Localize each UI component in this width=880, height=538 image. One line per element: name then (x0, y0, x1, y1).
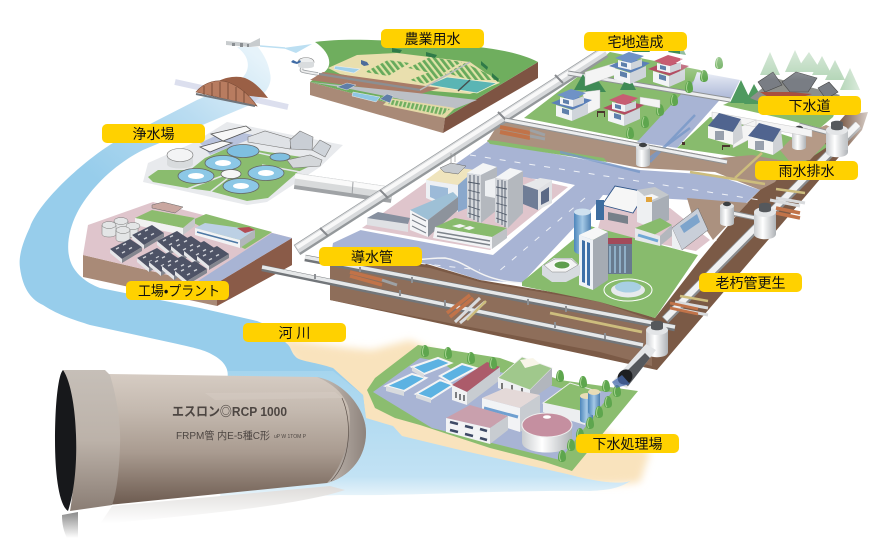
back lawn with fade (524, 52, 716, 142)
lower crop field (383, 98, 455, 118)
cut road outline (330, 258, 522, 283)
middle white block (485, 178, 495, 198)
tower 1 (467, 163, 497, 175)
near forest (730, 80, 765, 104)
digester (522, 425, 572, 452)
long tiered building (410, 192, 458, 220)
teal paddies (428, 77, 497, 93)
bridge (175, 77, 288, 107)
road surface (330, 142, 760, 283)
pipe marking: spec (176, 429, 307, 442)
earth (330, 112, 868, 370)
lawn (148, 146, 322, 201)
residential trees (574, 36, 686, 92)
tall glass tower (579, 227, 608, 240)
building with green roof (135, 210, 195, 228)
green roof building (635, 218, 672, 236)
label: 農業用水: 農業用水 (404, 31, 460, 47)
panel: water purification plant (143, 122, 343, 205)
brown terraces (310, 72, 440, 95)
tan terrace (328, 53, 500, 94)
road markings (345, 155, 760, 272)
label: 宅地造成 (584, 32, 687, 51)
facility and pond (337, 83, 393, 103)
filtration buildings (211, 126, 251, 141)
city buildings (367, 153, 708, 301)
product pipe (55, 370, 366, 538)
lawn (190, 214, 272, 249)
stone base and Japanese houses (750, 78, 840, 112)
pink roof building (446, 405, 508, 428)
service road (310, 82, 477, 110)
right lawn (677, 117, 830, 165)
clarifiers (178, 144, 290, 194)
fences (583, 63, 812, 148)
crop fields (365, 57, 500, 84)
road (198, 233, 292, 283)
icon: renewal pipe outlet (612, 344, 656, 388)
walkways (187, 147, 300, 192)
label: 浄水場 (102, 124, 205, 143)
settling tanks (386, 358, 476, 399)
label: 工場・プラント: 工場•プラント (138, 283, 220, 299)
sea water (220, 371, 632, 500)
green roof low building (435, 218, 507, 237)
field pipe (319, 74, 420, 90)
right edge fade (840, 50, 880, 150)
label: 老朽管更生 (699, 273, 802, 292)
label: 雨水排水: 雨水排水 (778, 163, 834, 179)
angled building (672, 208, 708, 250)
tower 2 (495, 168, 523, 180)
earth pipes (262, 258, 675, 346)
label: 農業用水 (381, 29, 484, 48)
red roof building (452, 362, 500, 392)
paved site (373, 358, 612, 460)
panel: agricultural land (310, 40, 538, 133)
green roof side building (543, 383, 600, 412)
tall main building (498, 357, 552, 390)
pipe network (262, 50, 858, 346)
hill surface (310, 40, 538, 118)
sheen (205, 392, 342, 400)
lawn (367, 345, 638, 471)
site (83, 202, 292, 283)
label: 河川: 河 川 (279, 325, 310, 341)
dark sawtooth sheds (110, 239, 142, 263)
fountain (604, 279, 652, 301)
manholes (636, 121, 848, 357)
city block (355, 172, 575, 255)
pink block right (590, 195, 717, 256)
gas station (602, 186, 646, 213)
dam (226, 38, 312, 53)
canal block (200, 130, 258, 155)
label: 下水処理場 (576, 434, 679, 453)
tractor (361, 60, 369, 66)
right main (665, 125, 858, 320)
label: 河川 (243, 323, 346, 342)
label: 宅地造成: 宅地造成 (608, 34, 664, 50)
octagon park (542, 258, 580, 282)
label: 老朽管更生: 老朽管更生 (716, 275, 786, 291)
plant supply pipe (295, 181, 392, 195)
label: 下水道: 下水道 (788, 98, 830, 114)
silo (167, 155, 193, 168)
pipe body (108, 374, 366, 505)
irrigation pond (334, 66, 360, 73)
opening (55, 370, 76, 511)
blue silos (580, 396, 593, 423)
lawn strip (487, 140, 607, 162)
far strip (723, 95, 840, 128)
trench pipes (560, 115, 695, 172)
socket collar (63, 370, 120, 511)
earth (83, 238, 292, 306)
label: 浄水場: 浄水場 (132, 126, 174, 142)
low grey building (367, 212, 410, 224)
yellow top building (426, 166, 475, 185)
river (20, 47, 366, 420)
dogs (597, 111, 730, 150)
label: 雨水排水 (755, 161, 858, 180)
pipe bundles (350, 127, 805, 323)
trees (421, 345, 429, 357)
houses and trees (551, 30, 880, 155)
label: 下水道 (758, 96, 861, 115)
small garage (523, 178, 552, 190)
top fade (680, 30, 880, 80)
storage tanks (102, 218, 140, 242)
pipe marking: spec: uP W 1TOM P (274, 434, 307, 440)
label: 下水処理場: 下水処理場 (592, 436, 662, 452)
feeder pipes in residential (505, 73, 730, 162)
panel: main cutaway town (330, 52, 868, 370)
office block (195, 223, 255, 240)
lawn top patch (415, 352, 490, 372)
water main diagonal (297, 52, 605, 250)
spigot end (317, 377, 366, 483)
label: 導水管: 導水管 (351, 249, 393, 265)
hedges (392, 48, 499, 82)
tan conduit (550, 313, 642, 332)
platform (143, 122, 343, 205)
gas station office (637, 187, 669, 202)
panel: factory plant (83, 202, 292, 306)
middle building (482, 388, 540, 408)
cut ground upper (487, 118, 790, 190)
front lawn (522, 226, 698, 318)
right mound (687, 198, 748, 240)
sand shore (278, 338, 650, 485)
back road (637, 77, 733, 148)
earth faces (310, 82, 445, 133)
label: 導水管 (319, 247, 422, 266)
pipe marking: brand: エスロン◎RCP 1000 (172, 404, 287, 419)
pump and intake pipe (291, 58, 318, 74)
reflection (100, 486, 345, 524)
red glass building (606, 238, 632, 274)
pale far forest (760, 50, 860, 90)
blue tank (574, 212, 591, 254)
pipe marking: spec: FRPM管 内E-5種C形 (176, 429, 270, 442)
admin buildings (248, 131, 292, 149)
panel: sewage treatment plant (367, 345, 638, 471)
